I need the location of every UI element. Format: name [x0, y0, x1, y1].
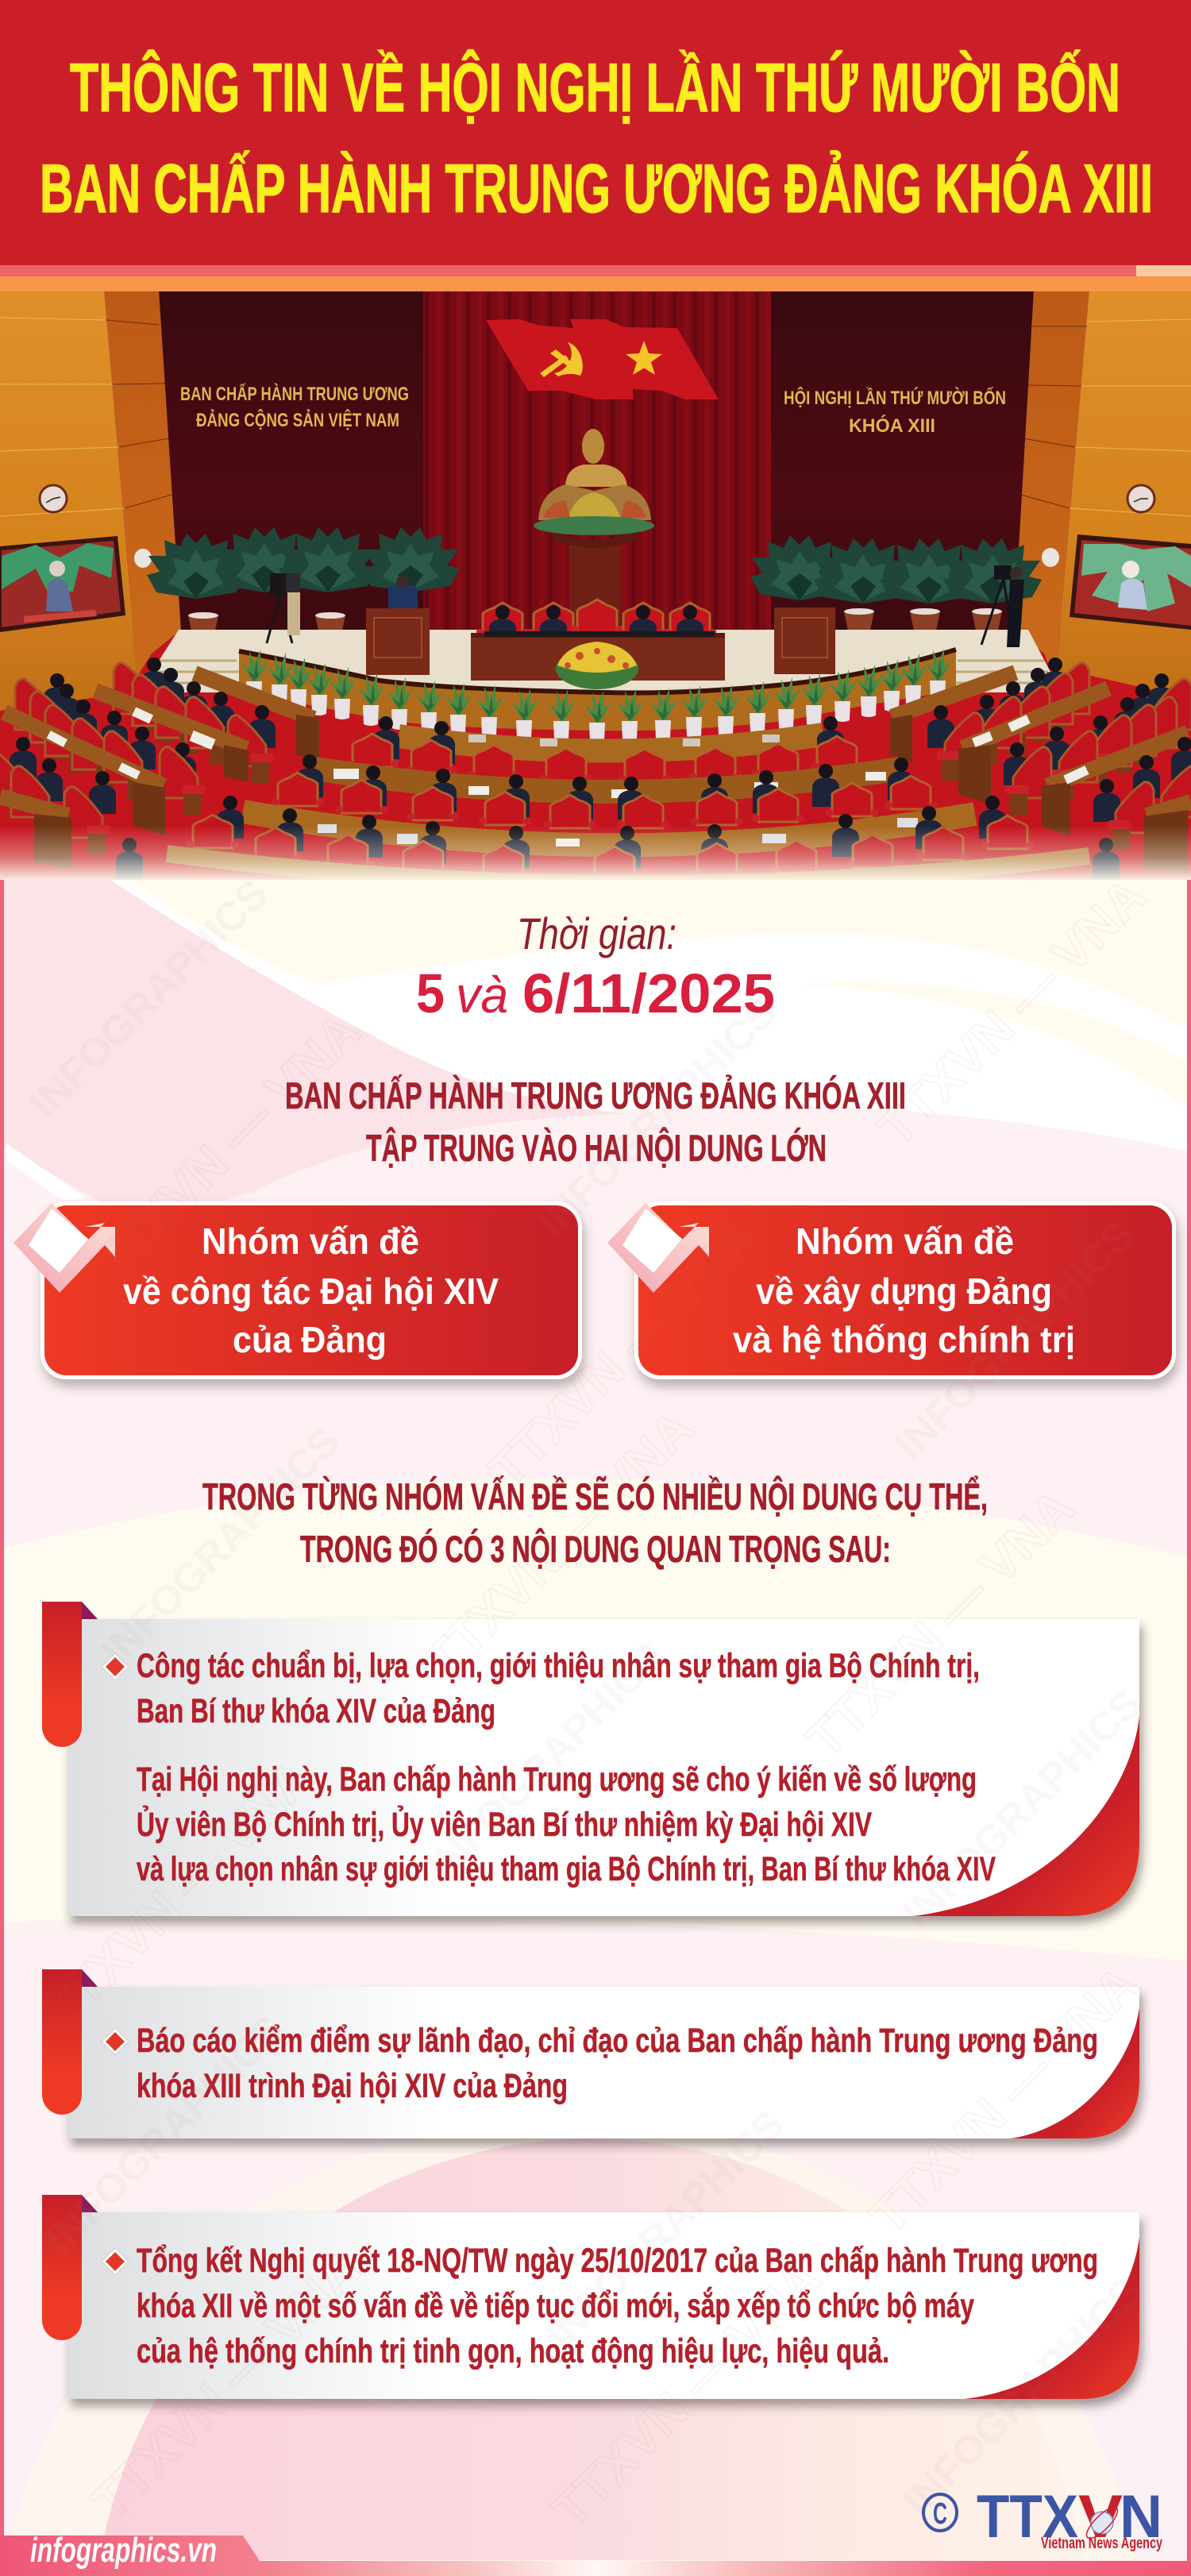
- group 1 text: Nhóm vấn đề: [202, 1221, 419, 1262]
- palms right: [750, 535, 1042, 634]
- carpet: [0, 627, 1191, 889]
- flower basket: [534, 484, 654, 548]
- card 1 ribbon: [42, 1602, 98, 1747]
- group 2 text: và hệ thống chính trị: [733, 1319, 1075, 1360]
- screen right: [1070, 534, 1191, 630]
- time label: Thời gian:: [517, 908, 676, 958]
- potted plants row: [241, 649, 952, 743]
- card 2 text: [137, 2022, 1098, 2105]
- centre pillar: [569, 546, 621, 631]
- copyright mark: C: [933, 2497, 947, 2531]
- podium right: [774, 607, 835, 674]
- card 2 text: khóa XIII trình Đại hội XIV của Đảng: [137, 2067, 568, 2105]
- footer band: [0, 2561, 1191, 2576]
- screen left: [0, 536, 125, 632]
- stage front trim: [239, 650, 956, 693]
- right seating blocks: [890, 657, 1191, 881]
- panel: card 2: [42, 1969, 1139, 2138]
- party flag: [486, 319, 719, 399]
- panel: group 1: [13, 1201, 582, 1379]
- logo letters: N: [1120, 2483, 1162, 2551]
- podium left with speaker: [366, 576, 430, 675]
- card 1 text: [137, 1647, 996, 1888]
- wall text left: BAN CHẤP HÀNH TRUNG ƯƠNG: [180, 383, 409, 405]
- time block: [416, 908, 775, 1024]
- side borders: [0, 880, 4, 2539]
- page background: [0, 880, 1191, 2576]
- icon: diamond arrow: [13, 1203, 115, 1293]
- security cameras: [134, 548, 1059, 568]
- right wall: [1014, 291, 1191, 699]
- card 3 ribbon: [42, 2195, 98, 2340]
- logo letters: V: [1078, 2483, 1123, 2551]
- card 1 text: Ban Bí thư khóa XIV của Đảng: [137, 1692, 495, 1730]
- wall text right: KHÓA XIII: [849, 415, 935, 437]
- logo letters: TTX: [977, 2483, 1078, 2551]
- subheading: three key contents: [202, 1475, 988, 1570]
- group 2 text: về xây dựng Đảng: [756, 1271, 1052, 1312]
- group 1 text: về công tác Đại hội XIV: [123, 1271, 499, 1312]
- group 1 text: [123, 1221, 499, 1360]
- cameraman left: [267, 573, 300, 643]
- card 1 curl: [913, 1715, 1139, 1916]
- subheading: two main contents: [285, 1074, 906, 1169]
- logo: TTXVN: [923, 2483, 1163, 2552]
- title banner: [0, 0, 1191, 292]
- group 1 text: của Đảng: [233, 1319, 387, 1360]
- row 2: [272, 754, 937, 828]
- left wall: [0, 291, 181, 711]
- subheading: two main contents: TẬP TRUNG VÀO HAI NỘI DUNG LỚN: [366, 1127, 827, 1169]
- palms left: [147, 527, 460, 638]
- card 3 curl: [965, 2237, 1139, 2399]
- bust: [565, 429, 627, 487]
- photo bottom fade: [0, 826, 1191, 883]
- subheading: three key contents: TRONG ĐÓ CÓ 3 NỘI DUNG QUAN TRỌNG SAU:: [300, 1528, 891, 1570]
- left seating blocks: [0, 657, 319, 881]
- icon: diamond arrow: [607, 1203, 709, 1293]
- wall text left: [180, 383, 409, 431]
- wall text left: ĐẢNG CỘNG SẢN VIỆT NAM: [196, 408, 399, 431]
- bullet: [102, 2028, 129, 2055]
- group 2 text: [733, 1221, 1075, 1360]
- row 4: [167, 854, 1089, 884]
- wall text right: HỘI NGHỊ LẦN THỨ MƯỜI BỐN: [784, 387, 1006, 409]
- card 1 text: Ủy viên Bộ Chính trị, Ủy viên Ban Bí thư nhiệm kỳ Đại hội XIV: [137, 1805, 872, 1844]
- head table chairs: [476, 600, 716, 648]
- panel: card 1: [42, 1602, 1139, 1916]
- watermarks: [21, 867, 1157, 2539]
- panel: group 2: [607, 1201, 1176, 1379]
- clocks: [40, 485, 1154, 512]
- copyright mark: [923, 2494, 957, 2531]
- panel: card 3: [42, 2195, 1139, 2399]
- bullet: [102, 1653, 129, 1680]
- date: 6/11/2025: [522, 962, 775, 1024]
- head table: [471, 631, 725, 681]
- row 1: [346, 716, 863, 782]
- hall photo illustration: [0, 291, 1191, 889]
- row 3: [187, 796, 1034, 880]
- wall text right: [784, 387, 1006, 437]
- stage front wood: [239, 650, 956, 731]
- footer tag: [0, 2531, 260, 2576]
- date: [416, 962, 775, 1024]
- globe: [1082, 2503, 1122, 2543]
- curtain: [423, 291, 771, 631]
- bullet: [102, 2248, 129, 2275]
- date: 5: [416, 962, 445, 1024]
- bouquet: [556, 642, 638, 689]
- group 2 text: Nhóm vấn đề: [796, 1221, 1014, 1262]
- stage floor and stairs: [151, 630, 1052, 693]
- card 3 text: [137, 2242, 1098, 2370]
- central seating rows: [167, 716, 1089, 884]
- logo letters: [977, 2483, 1162, 2551]
- website: infographics.vn: [30, 2531, 217, 2570]
- maroon wall panels: [159, 291, 423, 631]
- date: và: [456, 966, 508, 1024]
- subheading: two main contents: BAN CHẤP HÀNH TRUNG ƯƠNG ĐẢNG KHÓA XIII: [285, 1074, 906, 1116]
- card 2 curl: [1011, 2007, 1139, 2138]
- cameraman right: [981, 565, 1024, 647]
- card 3 text: của hệ thống chính trị tinh gọn, hoạt động hiệu lực, hiệu quả.: [137, 2332, 889, 2370]
- card 2 ribbon: [42, 1969, 98, 2115]
